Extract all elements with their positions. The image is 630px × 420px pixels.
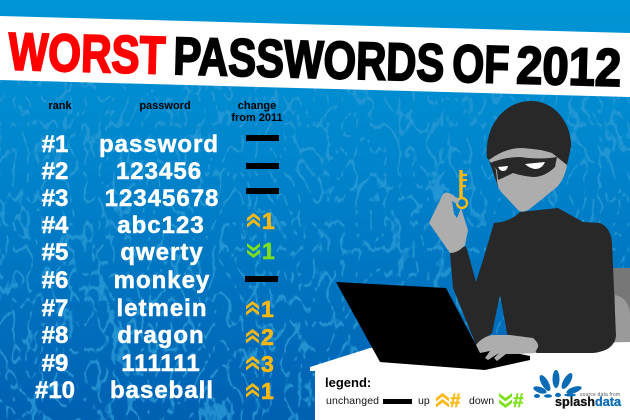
legend items: #	[513, 391, 524, 412]
rank column: #8	[42, 322, 68, 349]
hand on keyboard	[476, 335, 538, 361]
rank column: #7	[42, 295, 68, 322]
up and down markers: 1	[262, 238, 275, 264]
title text: OF	[452, 35, 510, 95]
splashdata logo	[532, 370, 622, 409]
column headers: password	[139, 100, 191, 112]
rank column: #6	[42, 267, 68, 294]
rank column: #3	[42, 185, 68, 212]
banner strip	[0, 16, 630, 97]
splash icon	[532, 370, 583, 398]
hood	[487, 101, 571, 208]
laptop	[336, 282, 530, 370]
up and down markers: 1	[261, 296, 274, 322]
key	[457, 170, 467, 208]
mask	[490, 157, 557, 180]
rank column: #10	[35, 377, 75, 404]
legend items: down	[469, 395, 494, 407]
chair	[612, 268, 630, 344]
up and down markers: 1	[261, 378, 274, 404]
legend items: up	[418, 395, 430, 407]
rank column	[35, 131, 75, 404]
up and down markers	[246, 208, 275, 404]
title text: WORST	[8, 23, 166, 86]
unchanged bars	[245, 135, 279, 282]
column headers: change	[238, 100, 276, 112]
legend	[325, 375, 524, 412]
legend items: #	[450, 391, 461, 412]
body	[450, 208, 616, 353]
rank column: #1	[42, 131, 68, 158]
password column: letmein	[116, 295, 208, 322]
up and down markers: 1	[262, 208, 275, 234]
password column: baseball	[110, 377, 214, 404]
password column: abc123	[117, 212, 205, 239]
password column: password	[99, 131, 219, 158]
logo wordmark: splashdata	[555, 395, 622, 409]
change column	[245, 135, 279, 404]
column headers: from 2011	[231, 112, 283, 124]
title text: PASSWORDS	[173, 27, 445, 93]
rank column: #4	[42, 212, 69, 239]
legend heading: legend:	[325, 375, 371, 390]
password column: 123456	[116, 158, 202, 185]
rank column: #2	[42, 158, 68, 185]
rank column: #9	[42, 350, 68, 377]
column headers: rank	[48, 100, 72, 112]
up and down markers: 2	[261, 324, 274, 350]
password column: monkey	[114, 267, 210, 294]
title text	[8, 23, 622, 98]
source note: source data from	[580, 392, 620, 398]
column headers	[48, 100, 283, 124]
desk	[310, 342, 630, 420]
up and down markers: 3	[261, 351, 274, 377]
password column: dragon	[117, 322, 205, 349]
legend items	[326, 391, 524, 412]
face	[489, 148, 567, 212]
password column: 111111	[121, 350, 201, 377]
rank column: #5	[42, 239, 68, 266]
title banner	[0, 16, 630, 98]
thief figure	[336, 101, 616, 370]
password column: 12345678	[105, 185, 219, 212]
password column: qwerty	[120, 239, 204, 266]
eyes	[525, 162, 545, 169]
hand holding key	[429, 192, 468, 253]
legend items: unchanged	[326, 395, 379, 407]
password column	[99, 131, 219, 404]
